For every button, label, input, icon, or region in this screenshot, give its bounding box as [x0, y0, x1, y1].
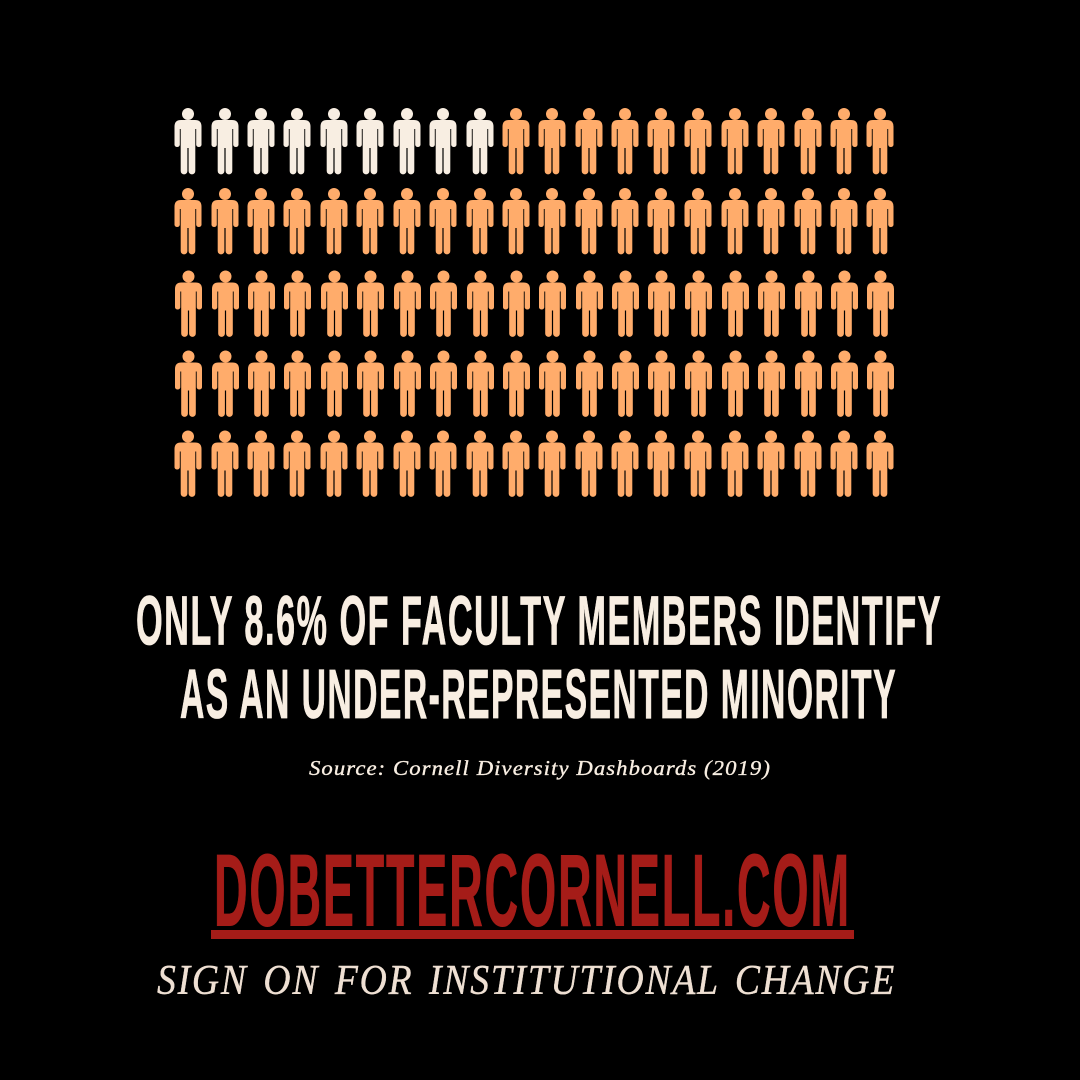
row 5: orange figures — [174, 430, 894, 497]
row 3: orange figures — [175, 270, 894, 337]
row 2: orange figures — [174, 188, 894, 254]
row 4: orange figures — [175, 350, 894, 417]
headline — [136, 582, 942, 733]
row 1: nine cream figures — [174, 108, 494, 174]
row 1: orange figures — [502, 108, 894, 174]
underline — [211, 930, 854, 939]
call to action: SIGN ON FOR INSTITUTIONAL CHANGE — [157, 958, 896, 1004]
source note: Source: Cornell Diversity Dashboards (2019) — [309, 756, 771, 780]
pictogram: 100 people — [174, 108, 894, 497]
website link — [211, 834, 854, 948]
